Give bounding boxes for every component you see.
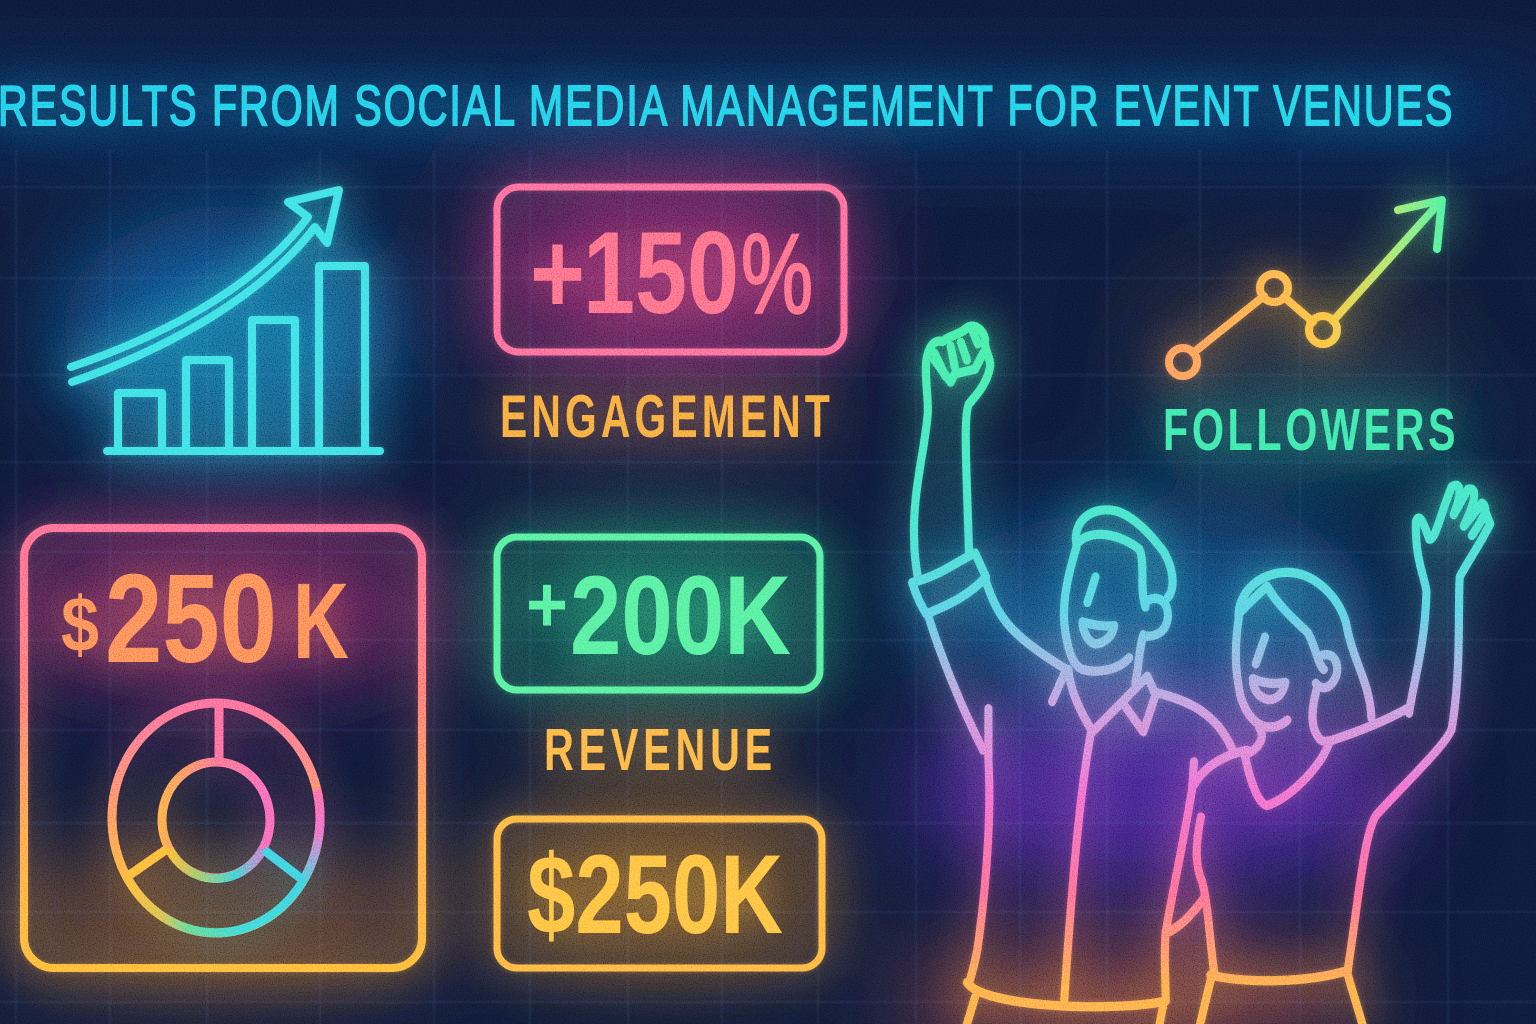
bars — [118, 266, 365, 451]
value: 250 — [105, 548, 277, 689]
title: RESULTS FROM SOCIAL MEDIA MANAGEMENT FOR EVENT VENUES — [0, 73, 1452, 138]
stat box — [497, 819, 822, 968]
panel: $250K box — [497, 819, 822, 968]
label: REVENUE — [544, 717, 772, 783]
followers label: FOLLOWERS — [1163, 397, 1456, 463]
icon: followers trend line — [1169, 200, 1442, 376]
panel: +150% engagement — [497, 187, 844, 450]
value: 200K — [570, 553, 791, 678]
value — [530, 207, 813, 338]
panel frame — [24, 528, 422, 968]
value: $ — [61, 580, 99, 668]
value: % — [741, 211, 813, 337]
baseline — [107, 447, 380, 455]
panel: $250K with donut chart — [24, 528, 422, 968]
stat box — [497, 537, 820, 690]
value: $250K — [527, 832, 783, 957]
icon: rising bar chart with arrow — [71, 190, 380, 451]
growth arrow — [71, 190, 339, 382]
value: + — [530, 207, 585, 338]
illustration: celebrating couple — [912, 326, 1490, 1024]
value: K — [293, 560, 349, 681]
woman — [1165, 485, 1490, 1024]
stat box — [497, 187, 844, 352]
man — [912, 326, 1233, 1024]
value: + — [526, 560, 568, 649]
donut chart — [112, 703, 320, 933]
value: 150 — [583, 207, 739, 338]
panel: +200K revenue — [497, 537, 820, 783]
label: ENGAGEMENT — [500, 383, 830, 450]
